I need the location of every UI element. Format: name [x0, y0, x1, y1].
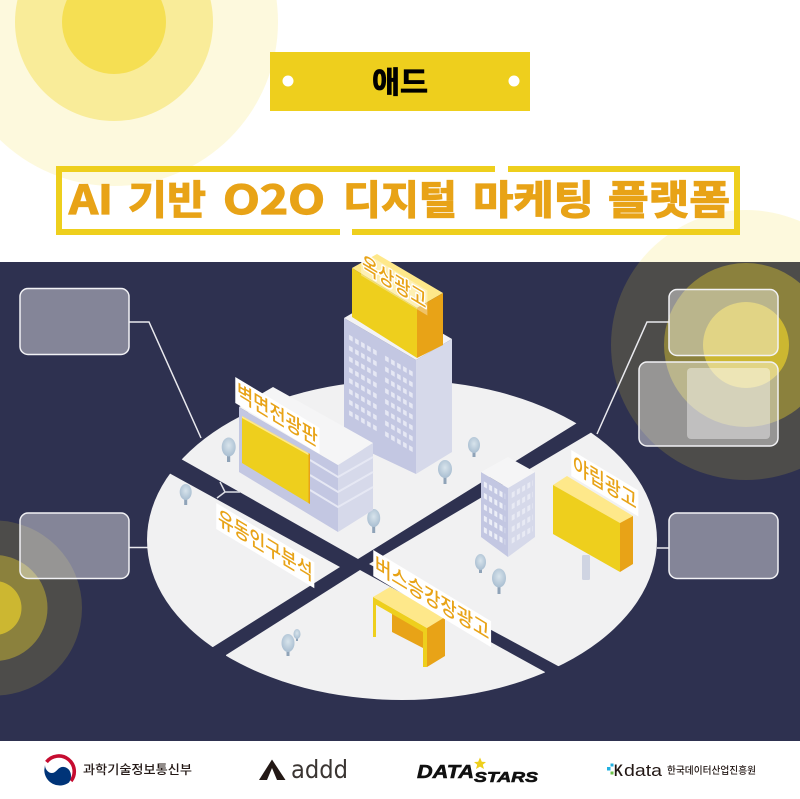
dark background band	[0, 262, 800, 741]
tall office building	[344, 297, 452, 474]
footer background	[0, 741, 800, 799]
wall screen building	[239, 387, 373, 532]
title frame	[56, 166, 740, 235]
rooftop billboard	[352, 254, 443, 358]
logo: K-data: 한국데이터산업진흥원	[667, 762, 756, 777]
trees	[180, 437, 506, 656]
label: foot traffic analysis: 유동인구분석	[218, 501, 313, 588]
title: 디지털	[343, 168, 457, 226]
label: roadside billboard: 야립광고	[573, 448, 637, 516]
connector lines	[129, 322, 669, 548]
title: 플랫폼	[608, 168, 730, 226]
logo: K-data: K	[614, 761, 624, 780]
brand badge	[270, 52, 530, 111]
title: 기반	[128, 168, 206, 226]
connector: inner branch on road	[217, 482, 240, 498]
card: upper left	[20, 288, 129, 354]
logo: data stars	[417, 758, 538, 786]
logo: K-data	[607, 761, 756, 780]
title: AI	[68, 168, 113, 226]
logo: ministry: 과학기술정보통신부	[83, 759, 192, 778]
bus stop shelter	[373, 587, 445, 667]
ground: city blocks	[147, 383, 657, 700]
small office building	[481, 457, 535, 557]
label: rooftop ad: 옥상광고	[362, 247, 427, 316]
decorative circles: right	[611, 210, 800, 480]
card: lower left	[20, 513, 129, 578]
decorative circles: top left	[0, 0, 278, 186]
title: 마케팅	[473, 168, 594, 226]
label: bus stop ad: 버스승강장광고	[375, 548, 489, 647]
logo: data stars: STARS	[474, 769, 538, 786]
title	[68, 168, 730, 226]
logo: addd: addd	[291, 755, 348, 784]
logo: ministry	[44, 756, 192, 786]
card: upper right	[669, 290, 778, 356]
card: middle right	[639, 362, 778, 446]
card: lower right	[669, 513, 778, 578]
logo: data stars: DATA	[417, 762, 474, 782]
decorative circles: bottom left	[0, 520, 82, 696]
brand badge: 애드	[372, 58, 428, 102]
label: wall screen: 벽면전광판	[237, 375, 318, 454]
title: O2O	[223, 168, 325, 226]
roadside billboard	[553, 476, 633, 580]
logo: K-data: data	[624, 761, 663, 780]
logo: addd	[259, 755, 348, 784]
